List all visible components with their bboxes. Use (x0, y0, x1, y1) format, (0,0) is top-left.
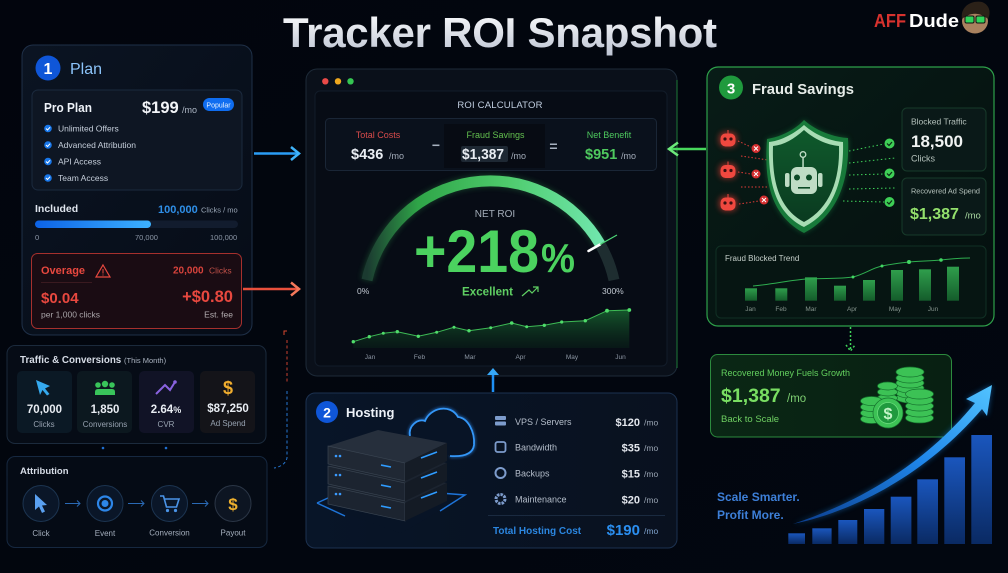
hosting cost rows: VPS / Servers (515, 417, 572, 427)
panel: recovered money: $1,387 (721, 385, 781, 407)
formula row: − (432, 137, 440, 153)
panel: attribution (7, 456, 267, 548)
metric: ad spend (200, 371, 255, 433)
pro plan card: $199 (142, 99, 179, 117)
overage card: +$0.80 (182, 288, 233, 306)
overage card: Clicks (209, 266, 232, 276)
title: Tracker ROI Snapshot (283, 9, 717, 56)
formula row (326, 118, 656, 170)
ROI trend chart: Jun (615, 354, 626, 361)
net ROI value: +218 (414, 218, 539, 285)
overage card: $0.04 (41, 290, 79, 307)
metric: conversions: Conversions (83, 420, 127, 429)
arrow: dashed attribution to ROI (274, 331, 287, 468)
logo: AFF Dude: Dude (909, 11, 959, 31)
stat: recovered ad spend: /mo (965, 210, 981, 222)
ROI gauge: 0% (357, 286, 370, 296)
metric: ad spend: $87,250 (207, 403, 249, 415)
arrow: overage to ROI (243, 282, 299, 296)
pro plan card: /mo (182, 105, 197, 115)
logo: AFF Dude (874, 2, 990, 34)
formula row: $1,387 (462, 147, 504, 163)
shield with robot (766, 120, 848, 233)
included clicks progress: Clicks / mo (201, 206, 238, 214)
icon: coin stacks (860, 367, 934, 428)
hosting badge (316, 401, 338, 423)
net ROI value: Excellent (462, 284, 513, 298)
arrow: plan to ROI (254, 147, 299, 160)
ROI trend chart (352, 308, 631, 361)
fraud blocked trend chart: Apr (847, 306, 858, 313)
metric: ad spend: $ (223, 378, 233, 398)
fraud heading: Fraud Savings (752, 82, 854, 98)
net ROI value (414, 209, 575, 298)
included clicks progress: 100,000 (210, 233, 237, 242)
pro plan card: Advanced Attribution (58, 140, 136, 150)
pro plan card: Unlimited Offers (58, 124, 119, 134)
ROI trend chart: Apr (515, 354, 526, 361)
window dots (322, 78, 354, 85)
step: conversion: Conversion (149, 528, 190, 538)
ROI trend chart: Mar (464, 354, 476, 361)
hosting cost rows: $15 (622, 468, 640, 480)
hosting total: /mo (644, 526, 658, 536)
fraud badge: 3 (727, 80, 735, 98)
hosting cost rows: Bandwidth (515, 442, 557, 452)
arrow: growth (793, 385, 992, 524)
step arrows (65, 500, 208, 506)
net ROI value: NET ROI (475, 209, 515, 220)
arrow: fraud savings to ROI (669, 142, 706, 156)
hosting cost rows: Maintenance (515, 494, 567, 504)
pro plan card (32, 90, 242, 190)
stat: blocked traffic (902, 108, 986, 171)
hosting cost rows: /mo (644, 443, 658, 453)
hosting cost rows: /mo (644, 495, 658, 505)
arrow: hosting to ROI (487, 368, 499, 392)
panel: recovered money: Recovered Money Fuels Growth (721, 368, 850, 378)
hosting cost rows: $35 (622, 442, 640, 454)
pro plan card: API Access (58, 156, 101, 166)
metric: conversions (77, 371, 132, 433)
fraud blocked trend chart: Fraud Blocked Trend (725, 254, 799, 263)
metric: clicks (17, 371, 72, 433)
formula row: /mo (389, 151, 404, 161)
step: payout: Payout (221, 528, 246, 538)
chart: growth bars (788, 435, 992, 544)
overage card (32, 254, 242, 328)
hosting total: $190 (607, 522, 640, 539)
overage card: Est. fee (204, 310, 233, 320)
formula row: $436 (351, 147, 383, 163)
blocked bots (719, 130, 768, 211)
formula row: /mo (621, 151, 636, 161)
panel: traffic and conversions: Traffic & Conversions (This Month) (20, 355, 167, 366)
step: payout (215, 486, 251, 538)
step: conversion (149, 486, 190, 538)
formula row: /mo (511, 151, 526, 161)
overage card: Overage (41, 265, 85, 277)
hosting cost rows: /mo (644, 418, 658, 428)
fraud blocked trend chart: May (889, 306, 902, 313)
stat: recovered ad spend: Recovered Ad Spend (911, 186, 980, 196)
stat: blocked traffic: Blocked Traffic (911, 116, 967, 126)
formula row: Net Benefit (587, 130, 632, 140)
illustration: cloud and servers (317, 409, 474, 533)
overage card: 20,000 (173, 266, 204, 276)
hosting cost rows: $20 (622, 494, 640, 506)
metric: clicks: 70,000 (27, 404, 62, 416)
net ROI value: % (541, 235, 575, 281)
panel: traffic and conversions (7, 346, 266, 444)
metric: ad spend: Ad Spend (210, 419, 246, 428)
panel: recovered money: Back to Scale (721, 414, 779, 425)
hosting total: Total Hosting Cost (493, 526, 582, 537)
panel: recovered money (710, 354, 952, 437)
metric: CVR: CVR (158, 420, 175, 429)
step: event (87, 486, 123, 538)
fraud blocked trend chart: Mar (805, 306, 817, 313)
included clicks progress: 100,000 (158, 204, 198, 216)
stat: blocked traffic: Clicks (911, 154, 935, 164)
metric: conversions: 1,850 (91, 404, 119, 416)
panel: recovered money: /mo (787, 393, 806, 405)
included clicks progress: 70,000 (135, 233, 158, 242)
hosting cost rows (495, 416, 658, 506)
panel: ROI calculator (306, 69, 677, 376)
ROI trend chart: Feb (414, 354, 425, 361)
included clicks progress: Included (35, 203, 78, 215)
stat: recovered ad spend (902, 178, 986, 235)
hosting cost rows: Backups (515, 468, 550, 478)
overage card: per 1,000 clicks (41, 310, 100, 320)
step: payout: $ (228, 495, 238, 514)
metric: CVR (139, 371, 194, 433)
included clicks progress: 0 (35, 233, 39, 242)
hosting cost rows: $120 (616, 417, 640, 429)
icon: coin stacks: $ (884, 406, 893, 423)
ROI trend chart: Jan (365, 354, 376, 361)
step: click: Click (32, 529, 51, 538)
fraud blocked trend chart (716, 246, 986, 318)
ROI trend chart: May (566, 354, 579, 361)
hosting badge: 2 (323, 404, 331, 420)
metric: CVR: 2.64% (151, 404, 181, 416)
step: click (23, 486, 59, 538)
hosting total (488, 516, 665, 539)
formula row: = (549, 138, 558, 154)
passed traffic (843, 138, 895, 207)
fraud blocked trend chart: Jun (928, 306, 939, 313)
hosting cost rows: /mo (644, 469, 658, 479)
pro plan card: Team Access (58, 173, 108, 183)
plan badge (36, 56, 60, 80)
fraud badge (719, 76, 743, 100)
logo: AFF Dude: AFF (874, 11, 906, 31)
panel: hosting (306, 393, 677, 548)
tagline: Scale Smarter. (717, 490, 800, 504)
calculator title: ROI CALCULATOR (457, 100, 543, 111)
metric: clicks: Clicks (33, 420, 55, 429)
fraud blocked trend chart: Feb (775, 306, 787, 313)
stat: recovered ad spend: $1,387 (910, 206, 959, 223)
panel: fraud savings (707, 67, 994, 326)
hosting heading: Hosting (346, 405, 394, 420)
step: event: Event (95, 529, 116, 538)
panel: plan (22, 45, 252, 335)
tagline (717, 490, 800, 522)
arrow: dotted fraud to recovered (846, 327, 855, 351)
plan badge: 1 (44, 61, 53, 78)
ROI gauge (357, 181, 624, 296)
formula row: $951 (585, 147, 617, 163)
connector dots (102, 447, 167, 459)
ROI gauge: 300% (602, 286, 624, 296)
plan heading: Plan (70, 61, 102, 78)
formula row: Total Costs (356, 130, 401, 140)
fraud blocked trend chart: Jan (745, 306, 756, 313)
tagline: Profit More. (717, 508, 784, 522)
formula row: Fraud Savings (466, 130, 525, 140)
pro plan card: Popular (206, 102, 231, 110)
panel: attribution: Attribution (20, 466, 69, 477)
stat: blocked traffic: 18,500 (911, 132, 963, 151)
pro plan card: Pro Plan (44, 100, 92, 115)
included clicks progress (35, 203, 238, 242)
